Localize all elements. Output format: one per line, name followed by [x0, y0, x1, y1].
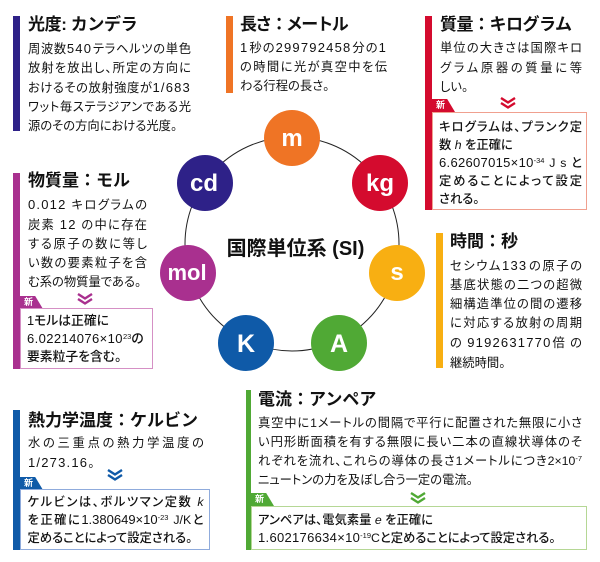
- unit circle: K: [218, 315, 274, 371]
- callout: mole new definition: [20, 308, 153, 369]
- text: second definition: 継続時間。: [450, 356, 505, 370]
- text: second definition: の 9192631770倍 の: [450, 335, 582, 350]
- callout: kilogram new definition: 6.62607015×10-34 J s と: [439, 155, 582, 170]
- text: second definition: セシウム133の原子の: [450, 258, 582, 272]
- unit circle: m: [264, 110, 320, 166]
- text: ampere old definition: れぞれを流れ、これらの導体の長さ1メートルにつき2×10-7: [258, 454, 582, 468]
- text: ampere old definition: [258, 416, 582, 487]
- unit circle: m: m: [281, 125, 303, 152]
- tag: new: 新: [24, 478, 33, 488]
- unit circle: kg: [352, 155, 408, 211]
- tag: new: 新: [24, 297, 33, 307]
- panel: second: [436, 232, 582, 370]
- icon: chevron down: [107, 469, 123, 481]
- heading: metre: 長さ：メートル: [240, 15, 347, 34]
- icon: chevron down: [77, 293, 93, 305]
- text: kilogram old definition: [440, 41, 582, 94]
- unit circle: mol: mol: [167, 260, 207, 285]
- heading: kelvin: 熱力学温度：ケルビン: [28, 411, 198, 430]
- text: candela definition: 源のその方向における光度。: [28, 119, 177, 133]
- callout: ampere new definition: [251, 506, 587, 550]
- panel: metre: [226, 15, 387, 93]
- callout: kilogram new definition: 定めることによって設定: [439, 174, 582, 188]
- text: kilogram old definition: 単位の大きさは国際キロ: [440, 41, 582, 55]
- text: metre definition: わる行程の長さ。: [240, 79, 329, 93]
- heading: kilogram: 質量：キログラム: [440, 15, 572, 34]
- callout: mole new definition: 要素粒子を含む。: [27, 349, 121, 364]
- callout: kilogram new definition: される。: [439, 192, 479, 206]
- callout: kilogram new definition: 数 h を正確に: [439, 138, 513, 152]
- tag: new: [251, 493, 274, 506]
- callout: mole new definition: 1モルは正確に: [27, 313, 109, 328]
- text: ampere old definition: ニュートンの力を及ぼし合う一定の電流。: [258, 473, 473, 487]
- text: mole old definition: [28, 196, 147, 289]
- text: second definition: 細構造準位の間の遷移: [450, 297, 582, 311]
- text: candela definition: 放射を放出し、所定の方向に: [28, 61, 191, 75]
- unit circle: mol: [160, 245, 216, 301]
- unit circle: s: s: [390, 259, 404, 286]
- unit circle: cd: cd: [190, 170, 218, 197]
- text: candela definition: おけるその放射強度が1/683: [28, 80, 191, 95]
- heading: mole: 物質量：モル: [28, 171, 130, 190]
- callout: kelvin new definition: ケルビンは、ボルツマン定数 k: [28, 495, 204, 509]
- icon: chevron down: [410, 492, 426, 504]
- text: kelvin old definition: 水の三重点の熱力学温度の: [28, 436, 204, 450]
- unit circle: A: [311, 315, 367, 371]
- text: candela definition: 周波数540テラヘルツの単色: [28, 41, 191, 56]
- callout: mole new definition: 6.02214076×1023の: [27, 331, 144, 346]
- tag: new: 新: [436, 100, 445, 110]
- text: mole old definition: 炭素 12 の中に存在: [28, 217, 147, 232]
- icon: chevron down: [500, 97, 516, 109]
- text: kilogram old definition: しい。: [440, 80, 468, 94]
- heading: candela: 光度: カンデラ: [28, 15, 137, 34]
- callout: kelvin new definition: [20, 489, 210, 550]
- text: ampere old definition: 真空中に1メートルの間隔で平行に配置された無限に小さ: [258, 416, 582, 430]
- text: kelvin old definition: [28, 436, 204, 470]
- text: mole old definition: い数の要素粒子を含: [28, 256, 147, 270]
- unit circle: kg: kg: [366, 170, 394, 197]
- heading: second: 時間：秒: [450, 232, 518, 251]
- callout: ampere new definition: 1.602176634×10-19Cと定めることによって設定される。: [258, 530, 556, 545]
- text: mole old definition: 0.012 キログラムの: [28, 196, 147, 212]
- center title: 国際単位系 (SI): [227, 237, 364, 260]
- unit circle: A: A: [330, 330, 348, 358]
- text: second definition: [450, 258, 582, 370]
- panel: mole: [13, 171, 153, 369]
- panel: kelvin: [13, 410, 210, 550]
- text: metre definition: 1秒の299792458分の1: [240, 40, 387, 55]
- text: metre definition: [240, 40, 387, 93]
- callout: ampere new definition: アンペアは、電気素量 e を正確に: [258, 512, 433, 526]
- text: mole old definition: む系の物質量である。: [28, 275, 141, 289]
- unit circle: cd: [177, 155, 233, 211]
- text: second definition: に対応する放射の周期: [450, 316, 582, 330]
- panel: candela: [13, 15, 191, 133]
- tag: new: [20, 296, 43, 309]
- callout: kilogram new definition: キログラムは、プランク定: [439, 120, 582, 134]
- unit circle: K: K: [237, 330, 255, 358]
- tag: new: 新: [255, 494, 264, 504]
- callout: kelvin new definition: を正確に1.380649×10-23 J/Kと: [28, 512, 204, 527]
- panel: kilogram: [425, 15, 587, 210]
- text: metre definition: の時間に光が真空中を伝: [240, 60, 387, 74]
- tag: new: [20, 477, 43, 490]
- unit circle: s: [369, 245, 425, 301]
- tag: new: [432, 99, 455, 112]
- text: kelvin old definition: 1/273.16。: [28, 454, 94, 470]
- callout: kelvin new definition: 定めることによって設定される。: [28, 531, 192, 545]
- text: kilogram old definition: グラム原器の質量に等: [440, 60, 582, 74]
- text: second definition: 基底状態の二つの超微: [450, 278, 582, 292]
- callout: kilogram new definition: [432, 112, 587, 210]
- text: candela definition: [28, 41, 191, 133]
- heading: ampere: 電流：アンペア: [258, 390, 376, 409]
- text: mole old definition: する原子の数に等し: [28, 237, 147, 251]
- text: candela definition: ワット毎ステラジアンである光: [28, 100, 191, 114]
- panel: ampere: [246, 390, 587, 550]
- text: ampere old definition: い円形断面積を有する無限に長い二本の直線状導体のそ: [258, 435, 582, 449]
